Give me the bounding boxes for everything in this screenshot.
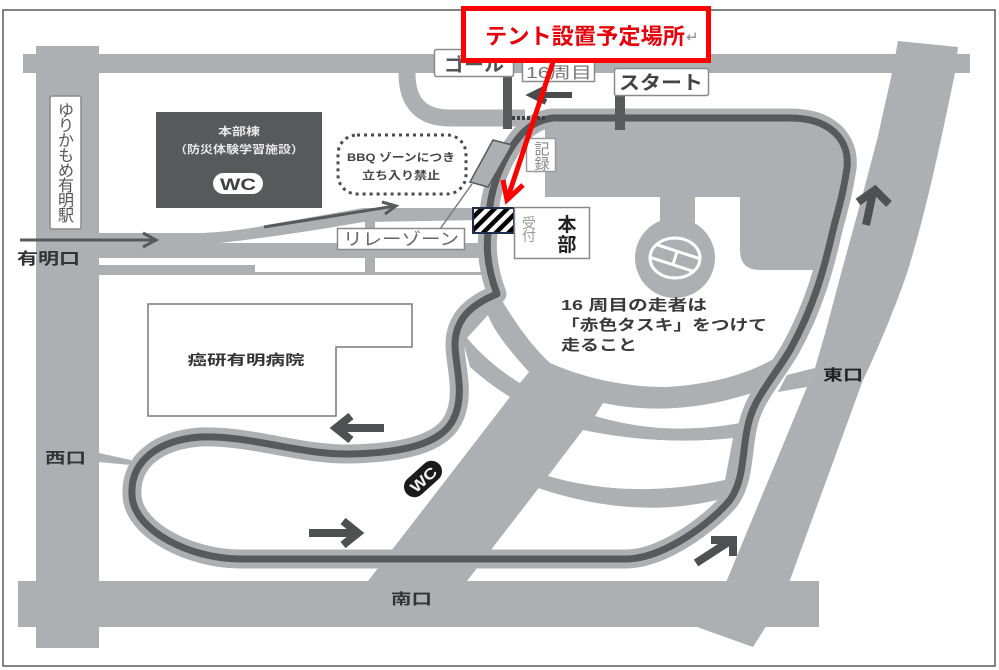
label: start: [614, 68, 708, 96]
label: west gate: 西口: [45, 450, 86, 467]
label: goal: ゴール: [444, 53, 504, 76]
tent location hatched box: [473, 208, 514, 233]
note: lap 16 runners: 16 周目の走者は: [561, 297, 707, 314]
label: headquarters reception: [514, 208, 590, 258]
running track: [132, 118, 847, 559]
goal post: [503, 76, 512, 129]
callout: tent location: [464, 8, 708, 60]
notice: BBQ zone: 立ち入り禁止: [362, 168, 440, 182]
label: goal: [434, 50, 514, 76]
notice: BBQ zone: [338, 135, 466, 194]
label: headquarters reception: 本部: [557, 214, 577, 256]
plaza circle: [635, 190, 715, 298]
label: relay zone: リレーゾーン: [343, 230, 459, 249]
label: lap 16: [522, 60, 594, 82]
label: south gate: 南口: [391, 591, 432, 608]
label: records: 記録: [534, 141, 550, 173]
red arrow to tent location: [503, 62, 553, 200]
building: hospital: 癌研有明病院: [188, 352, 304, 368]
building: headquarters: （防災体験学習施設）: [174, 142, 304, 156]
notice: BBQ zone: BBQ ゾーンにつき: [347, 151, 455, 164]
icon: WC: WC: [407, 464, 441, 496]
label: start: スタート: [619, 72, 703, 94]
building: headquarters: WC: [220, 175, 256, 194]
arrow: north: [858, 190, 889, 225]
building: headquarters: [156, 112, 322, 208]
start post: [615, 94, 625, 130]
label: Ariake gate: 有明口: [17, 250, 80, 268]
goal dotted line: [512, 116, 545, 120]
icon: WC: [400, 456, 446, 502]
callout: tent location: ↵: [686, 29, 699, 46]
note: lap 16 runners: [561, 297, 767, 354]
note: lap 16 runners: 走ること: [561, 337, 637, 354]
label: lap 16: 16周目: [526, 65, 592, 82]
label: east gate: 東口: [823, 367, 863, 384]
arrow: eastward: [309, 521, 358, 545]
label: records: [526, 138, 556, 173]
building: hospital: [148, 304, 412, 416]
building: headquarters: 本部棟: [218, 124, 260, 138]
arrow: northeast: [696, 540, 733, 563]
arrow: entry from Ariake gate: [20, 233, 156, 247]
label: headquarters reception: 受付: [522, 215, 536, 244]
arrow: lap direction at top: [532, 88, 572, 102]
arrow: toward BBQ zone: [264, 202, 396, 227]
relay zone connector: [440, 184, 472, 229]
station label: ゆりかもめ有明駅: [58, 102, 74, 225]
relay zone marker: [470, 140, 512, 187]
note: lap 16 runners: 「赤色タスキ」をつけて: [561, 316, 767, 334]
station label: [50, 96, 81, 229]
arrow: westward: [336, 416, 384, 440]
infield white areas: [467, 125, 815, 489]
callout: tent location: テント設置予定場所: [485, 24, 685, 49]
